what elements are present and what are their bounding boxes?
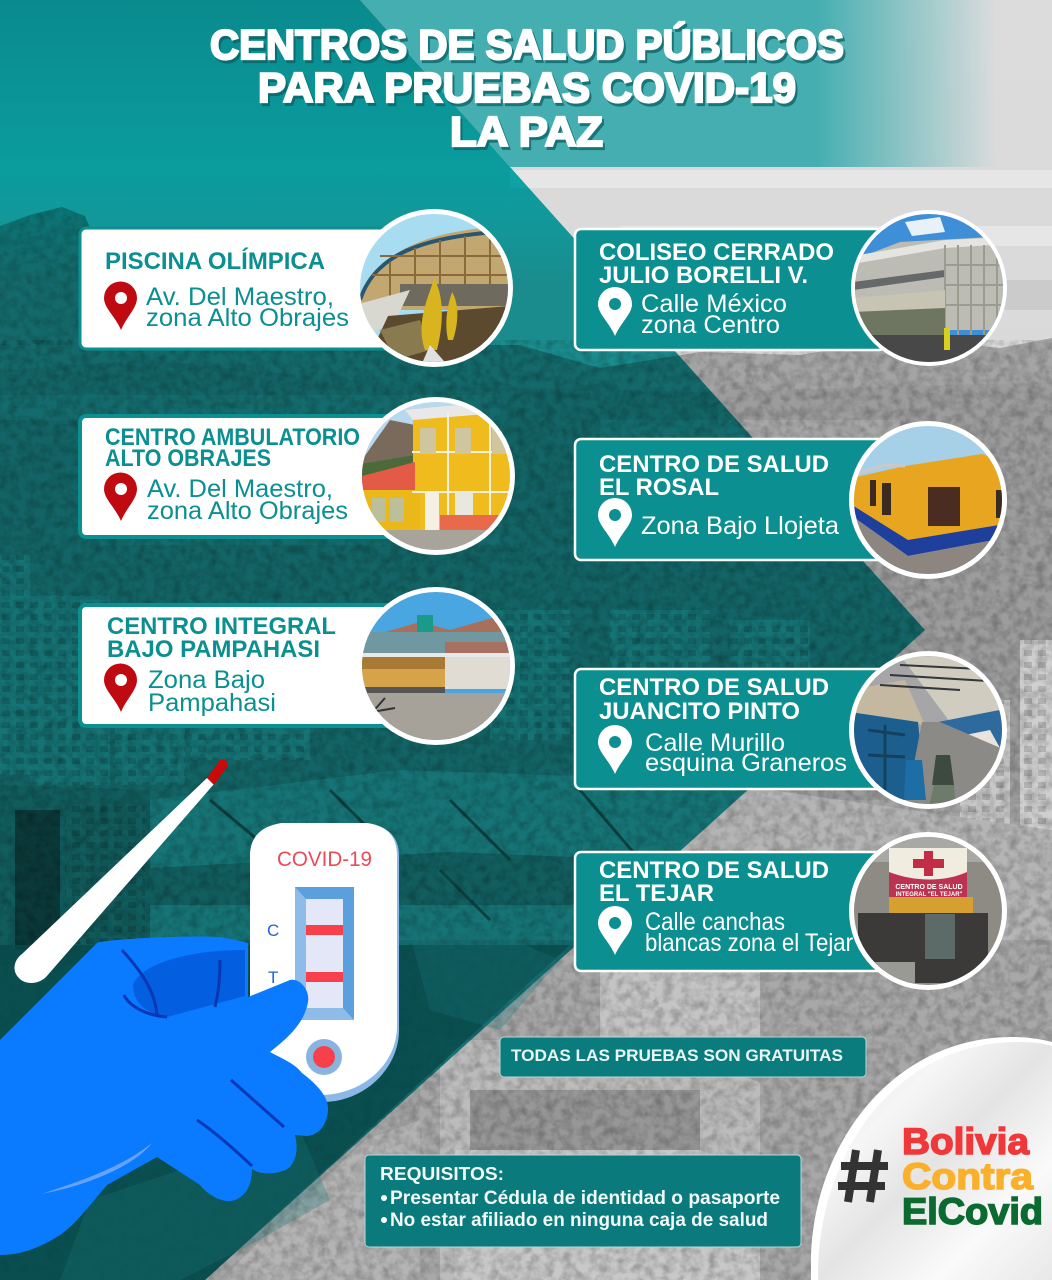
title: CENTROS DE SALUD PÚBLICOS: [212, 23, 846, 71]
panel: Centro de Salud El Tejar: EL TEJAR: [599, 880, 714, 907]
test cassette: [250, 823, 399, 1102]
top band: light teal diagonal: [360, 0, 1052, 167]
panel: Coliseo Cerrado Julio Borelli V.: COLISEO CERRADO: [599, 239, 834, 266]
panel: Centro de Salud Juancito Pinto: esquina Graneros: [645, 749, 847, 777]
callout: todas las pruebas son gratuitas: TODAS LAS PRUEBAS SON GRATUITAS: [511, 1046, 843, 1065]
icon: gloved hand: [0, 937, 328, 1255]
panel: Centro Integral Bajo Pampahasi: Zona Bajo: [148, 666, 265, 694]
icon: swab: [15, 759, 227, 983]
panel: Centro de Salud Juancito Pinto: CENTRO DE SALUD: [599, 674, 829, 701]
panel: Centro de Salud El Tejar: [575, 832, 1010, 992]
test cassette: T: [268, 968, 278, 987]
panel: Centro de Salud El Tejar: Calle canchas: [645, 908, 785, 936]
panel: Centro de Salud Juancito Pinto: Calle Murillo: [645, 729, 785, 757]
title: PARA PRUEBAS COVID-19: [258, 64, 796, 111]
panel: Centro de Salud El Tejar: INTEGRAL "EL TEJAR": [896, 892, 963, 898]
panel: Centro Ambulatorio Alto Obrajes: [80, 395, 520, 560]
panel: Centro Ambulatorio Alto Obrajes: Av. Del Maestro,: [147, 475, 333, 503]
logo: Bolivia Contra el Covid: ElCovid: [902, 1191, 1043, 1232]
panel: Centro Ambulatorio Alto Obrajes: CENTRO AMBULATORIO: [105, 424, 360, 451]
panel: Centro de Salud El Rosal: [575, 420, 1010, 580]
panel: Centro de Salud El Rosal: Zona Bajo Llojeta: [641, 512, 839, 540]
panel: Centro de Salud El Rosal: CENTRO DE SALUD: [599, 451, 829, 478]
panel: Centro Integral Bajo Pampahasi: CENTRO INTEGRAL: [107, 613, 336, 640]
title: CENTROS DE SALUD PÚBLICOS: [210, 20, 844, 68]
panel: Centro de Salud El Tejar: blancas zona el Tejar: [645, 929, 853, 957]
callout: requisitos: REQUISITOS:: [380, 1164, 504, 1184]
panel: Piscina Olímpica: Av. Del Maestro,: [146, 283, 334, 311]
logo: Bolivia Contra el Covid: Contra: [902, 1156, 1033, 1197]
logo: Bolivia Contra el Covid: Bolivia: [902, 1121, 1029, 1162]
logo: Bolivia Contra el Covid: [811, 1037, 1052, 1280]
callout: requisitos: No estar afiliado en ninguna caja de salud: [390, 1210, 768, 1231]
panel: Centro Integral Bajo Pampahasi: BAJO PAMPAHASI: [107, 636, 320, 663]
panel: Centro de Salud El Tejar: CENTRO DE SALUD: [599, 857, 829, 884]
panel: Centro Integral Bajo Pampahasi: [80, 585, 520, 750]
panel: Piscina Olímpica: PISCINA OLÍMPICA: [105, 247, 325, 275]
panel: Centro de Salud Juancito Pinto: JUANCITO PINTO: [599, 698, 800, 725]
title: PARA PRUEBAS COVID-19: [260, 67, 798, 114]
dark lower-left zone: [0, 945, 570, 1280]
panel: Coliseo Cerrado Julio Borelli V.: [575, 208, 1010, 370]
title: [210, 20, 846, 158]
panel: Piscina Olímpica: zona Alto Obrajes: [146, 304, 349, 332]
title: LA PAZ: [452, 111, 605, 158]
callout: requisitos: [365, 1155, 801, 1247]
callout: requisitos: Presentar Cédula de identidad o pasaporte: [390, 1188, 780, 1209]
panel: Centro Ambulatorio Alto Obrajes: ALTO OBRAJES: [105, 445, 271, 472]
panel: Centro Integral Bajo Pampahasi: Pampahasi: [148, 689, 276, 717]
panel: Coliseo Cerrado Julio Borelli V.: zona Centro: [641, 311, 780, 339]
test cassette: C: [267, 921, 279, 940]
panel: Centro Ambulatorio Alto Obrajes: zona Alto Obrajes: [147, 497, 348, 525]
callout: todas las pruebas son gratuitas: [500, 1037, 866, 1077]
title: LA PAZ: [450, 108, 603, 155]
panel: Centro de Salud El Tejar: CENTRO DE SALUD: [895, 884, 963, 891]
panel: Centro de Salud El Rosal: EL ROSAL: [599, 474, 719, 501]
stadium: [150, 770, 1052, 940]
panel: Coliseo Cerrado Julio Borelli V.: Calle México: [641, 290, 787, 318]
test cassette: COVID-19: [277, 848, 372, 871]
panel: Coliseo Cerrado Julio Borelli V.: JULIO BORELLI V.: [599, 262, 808, 289]
panel: Centro de Salud Juancito Pinto: [575, 650, 1010, 810]
panel: Piscina Olímpica: [80, 208, 515, 372]
